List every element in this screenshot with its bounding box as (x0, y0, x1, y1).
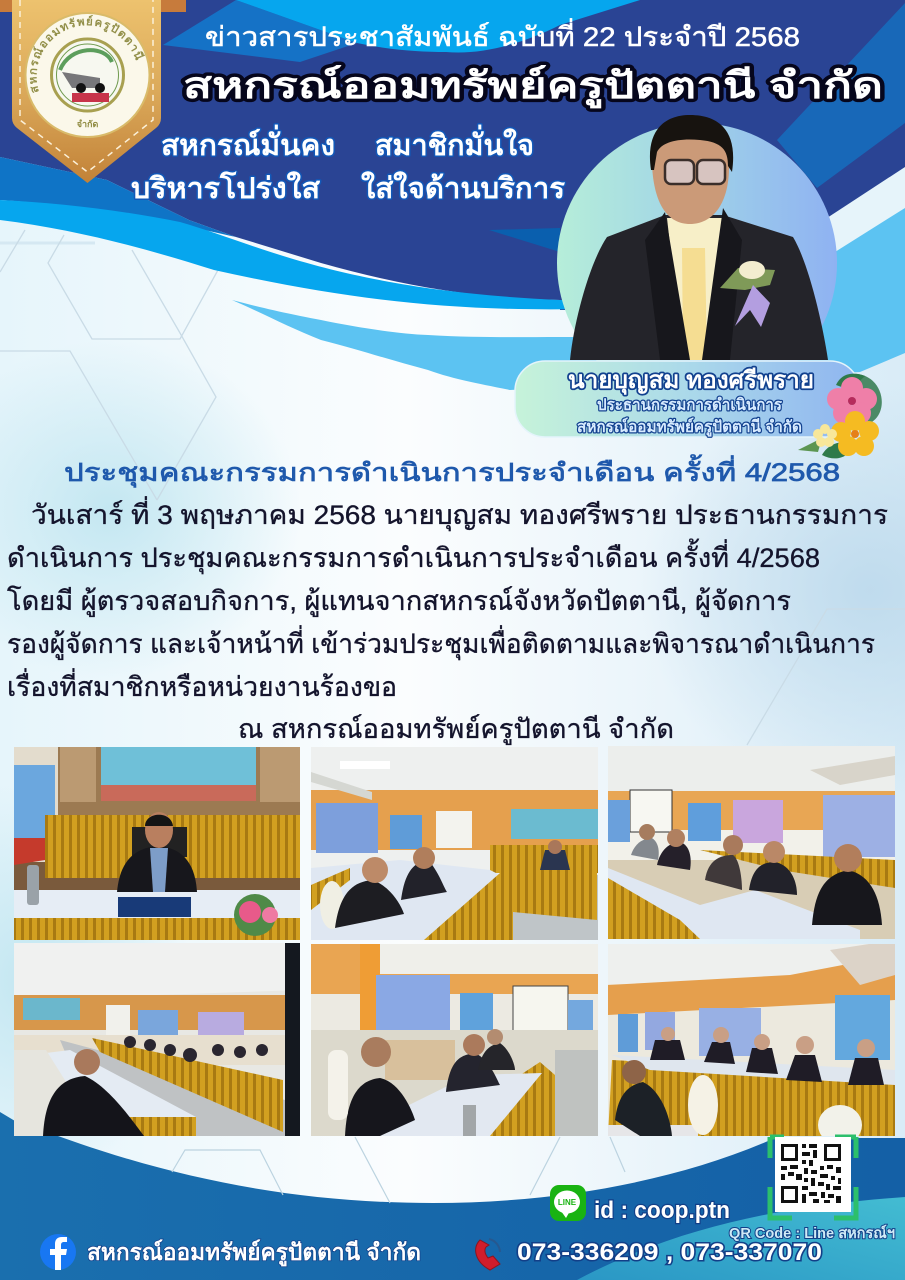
photo: committee members at table (608, 746, 895, 939)
icon: LINE: LINE (558, 1198, 577, 1207)
logo badge (0, 0, 186, 183)
background hexagon pattern (0, 230, 905, 745)
portrait of chairman (557, 115, 837, 403)
name plate: นายบุญสม ทองศรีพราย (568, 367, 814, 396)
icon: telephone (476, 1239, 500, 1270)
name plate (515, 361, 860, 438)
name plate: ประธานกรรมการดำเนินการ (597, 396, 782, 414)
meeting heading: ประชุมคณะกรรมการดำเนินการประจำเดือน ครั้งที่ 4/2568 (64, 454, 840, 488)
publication line: ข่าวสารประชาสัมพันธ์ ฉบับที่ 22 ประจำปี 2568 (205, 18, 800, 52)
Facebook page name: สหกรณ์ออมทรัพย์ครูปัตตานี จำกัด (87, 1239, 421, 1267)
photo: chairman at head table (14, 747, 300, 940)
photo: members seated with window (311, 944, 598, 1136)
body text: โดยมี ผู้ตรวจสอบกิจการ, ผู้แทนจากสหกรณ์จังหวัดปัตตานี, ผู้จัดการ (7, 585, 791, 617)
body text: ดำเนินการ ประชุมคณะกรรมการดำเนินการประจำเดือน ครั้งที่ 4/2568 (7, 538, 820, 575)
slogan: ใส่ใจด้านบริการ (361, 171, 565, 205)
icon: LINE (550, 1185, 586, 1221)
logo badge: สหกรณ์ออมทรัพย์ครูปัตตานี (30, 15, 145, 93)
footer band (0, 1112, 905, 1280)
name plate: สหกรณ์ออมทรัพย์ครูปัตตานี จำกัด (577, 417, 802, 438)
slogan: สมาชิกมั่นใจ (375, 124, 534, 162)
telephone numbers: 073-336209 , 073-337070 (517, 1239, 822, 1266)
photo: long table view (14, 943, 300, 1136)
header wave background (0, 0, 905, 390)
slogan: สหกรณ์มั่นคง (161, 124, 335, 162)
title: สหกรณ์ออมทรัพย์ครูปัตตานี จำกัด (183, 65, 883, 109)
slogan: บริหารโปร่งใส (131, 170, 320, 205)
body text: วันเสาร์ ที่ 3 พฤษภาคม 2568 นายบุญสม ทองศรีพราย ประธานกรรมการ (31, 496, 888, 532)
logo badge: จำกัด (77, 119, 98, 129)
body text: รองผู้จัดการ และเจ้าหน้าที่ เข้าร่วมประชุมเพื่อติดตามและพิจารณาดำเนินการ (7, 625, 875, 661)
QR code (770, 1137, 856, 1218)
body text (7, 496, 888, 745)
icon: Facebook (40, 1234, 76, 1270)
body text: ณ สหกรณ์ออมทรัพย์ครูปัตตานี จำกัด (238, 713, 674, 745)
QR caption: QR Code : Line สหกรณ์ฯ (729, 1224, 895, 1242)
photo: members along table (608, 940, 895, 1145)
photo: meeting room with banner (311, 747, 598, 940)
slogan (131, 124, 565, 205)
flower decoration (798, 374, 882, 458)
body text: เรื่องที่สมาชิกหรือหน่วยงานร้องขอ (7, 668, 397, 702)
LINE id: id : coop.ptn (594, 1197, 730, 1224)
